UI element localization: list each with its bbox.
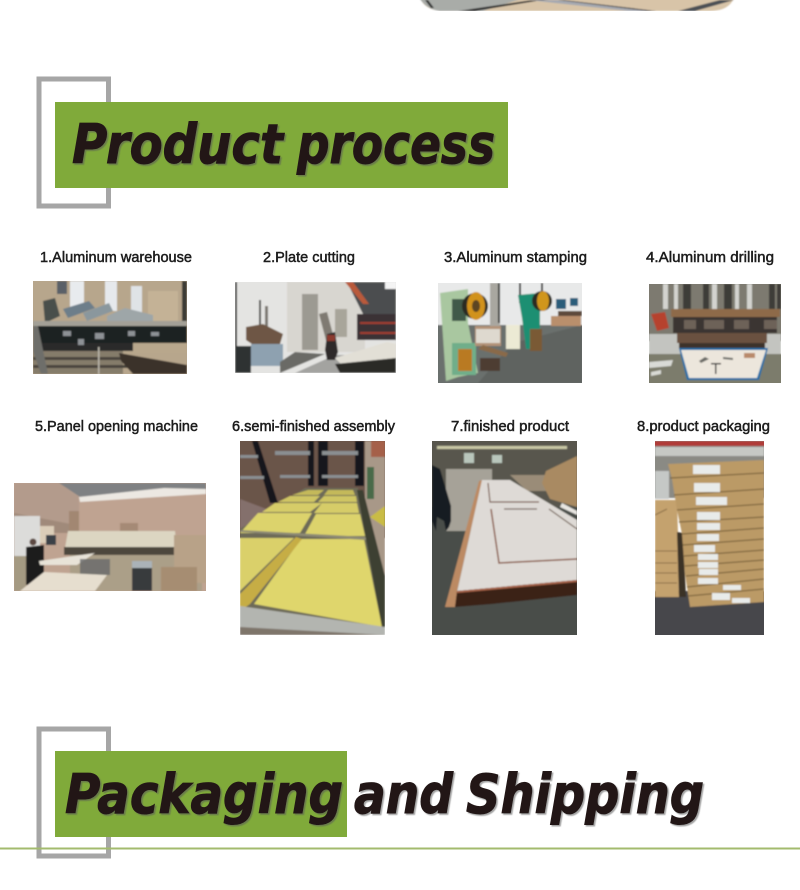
grey frame [39, 729, 108, 856]
grey frame [39, 79, 108, 206]
heading text: process [296, 113, 495, 176]
step 6 label: 6.semi-finished assembly [232, 418, 395, 435]
heading text: Product [72, 113, 285, 176]
step 5 label: 5.Panel opening machine [35, 418, 198, 435]
step 8 label: 8.product packaging [637, 418, 770, 435]
step 2 label: 2.Plate cutting [263, 249, 355, 266]
heading text [65, 763, 704, 826]
step 2 photo: plate cutting [232, 279, 402, 379]
step 8 photo: product packaging [652, 438, 767, 639]
top cropped photo [418, 0, 736, 11]
step 1 photo: aluminum warehouse [30, 278, 190, 378]
step 3 photo: aluminum stamping [435, 280, 585, 385]
green banner [55, 102, 508, 188]
heading text: and [354, 763, 454, 826]
step 6 photo: semi-finished assembly [237, 438, 392, 635]
heading: Product process [39, 79, 508, 206]
heading text: Shipping [466, 763, 704, 826]
step 3 label: 3.Aluminum stamping [444, 249, 587, 266]
step 4 photo: aluminum drilling [646, 281, 786, 386]
step 5 photo: panel opening machine [11, 480, 211, 595]
green banner [55, 751, 347, 837]
step 7 label: 7.finished product [451, 418, 570, 435]
step 4 label: 4.Aluminum drilling [646, 249, 774, 266]
heading: Packaging and Shipping [0, 729, 800, 856]
step 1 label: 1.Aluminum warehouse [40, 249, 192, 266]
green divider line [0, 848, 800, 850]
heading text [72, 113, 495, 176]
heading text: Packaging [65, 763, 343, 826]
step 7 photo: finished product [429, 438, 584, 639]
